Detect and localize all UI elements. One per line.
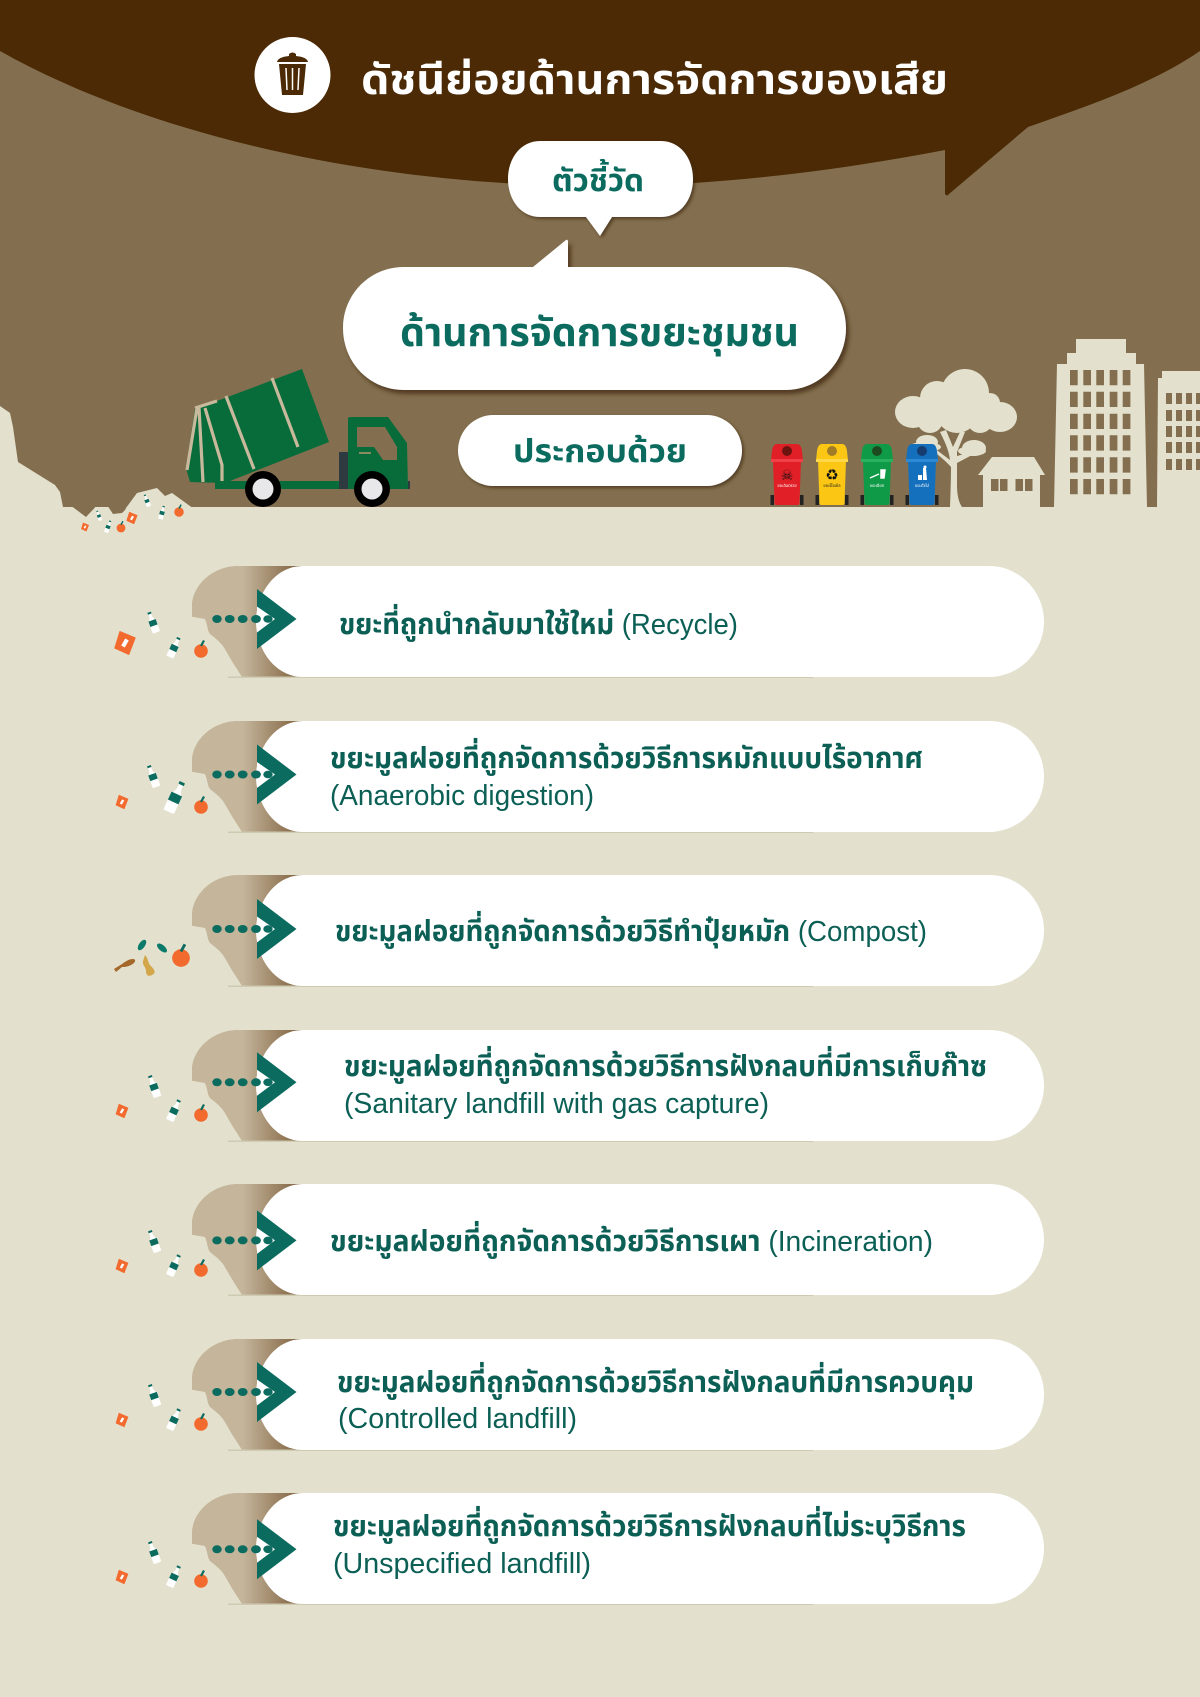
label: (Anaerobic digestion) [330, 780, 594, 812]
arrow with dots [212, 1210, 296, 1270]
bin: recycle yellow [816, 444, 848, 505]
label [330, 737, 923, 812]
bubble: consists of: ประกอบด้วย [513, 433, 687, 469]
title: ดัชนีย่อยด้านการจัดการของเสีย [361, 56, 948, 103]
bin: recycle yellow: ขยะรีไซเคิล [823, 483, 841, 488]
label: ขยะที่ถูกนำกลับมาใช้ใหม่ (Recycle) [339, 603, 738, 642]
row 2: anaerobic digestion [116, 721, 1044, 833]
litter icons [116, 764, 208, 814]
building: right edge tower [1157, 371, 1200, 507]
bubble: community waste management [343, 240, 846, 390]
background: brown sky [0, 0, 1200, 507]
bubble: indicator [508, 141, 693, 236]
bin: hazardous red: ☠ [781, 467, 793, 483]
bin: general blue [906, 444, 938, 505]
row 4: sanitary landfill [116, 1030, 1044, 1142]
bin: general blue: ขยะทั่วไป [915, 482, 930, 488]
row 6: controlled landfill [116, 1339, 1044, 1451]
tree [895, 369, 1017, 507]
row 5: incineration [116, 1184, 1044, 1296]
litter icons [116, 1229, 208, 1277]
house [978, 457, 1045, 507]
bin: recycle yellow: ♻ [825, 467, 839, 484]
litter icons [116, 1383, 208, 1431]
arrow with dots [212, 589, 296, 649]
row 7: unspecified landfill [116, 1493, 1044, 1605]
label [333, 1505, 966, 1580]
bin: organic green [860, 444, 894, 505]
bubble: consists of [458, 415, 742, 486]
landscape: left hill with waste pile [0, 406, 192, 533]
building: tall tower [1054, 339, 1147, 507]
litter icons [116, 1074, 208, 1122]
label: ขยะมูลฝอยที่ถูกจัดการด้วยวิธีการหมักแบบไร้อากาศ [330, 737, 923, 776]
label: ขยะมูลฝอยที่ถูกจัดการด้วยวิธีการฝังกลบที่ไม่ระบุวิธีการ [333, 1505, 966, 1544]
label [344, 1045, 987, 1120]
header speech banner [0, 0, 1200, 196]
litter icons [116, 1540, 208, 1588]
garbage truck [186, 369, 410, 507]
arrow with dots [212, 1362, 296, 1422]
label: (Sanitary landfill with gas capture) [344, 1088, 769, 1120]
arrow with dots [212, 899, 296, 959]
row 3: compost [114, 875, 1044, 987]
label: ขยะมูลฝอยที่ถูกจัดการด้วยวิธีการฝังกลบที่มีการควบคุม [337, 1361, 974, 1400]
label: ขยะมูลฝอยที่ถูกจัดการด้วยวิธีการฝังกลบที่มีการเก็บก๊าซ [344, 1045, 987, 1084]
bins: four coloured waste bins [770, 444, 938, 505]
organic litter icons [114, 938, 190, 976]
label: (Unspecified landfill) [333, 1548, 591, 1580]
bin: organic green: ขยะเปียก [870, 483, 885, 488]
label: (Controlled landfill) [338, 1403, 577, 1435]
arrow with dots [212, 744, 296, 804]
bin: hazardous red [770, 444, 804, 505]
bubble: community waste management: ด้านการจัดการขยะชุมชน [400, 310, 799, 357]
arrow with dots [212, 1052, 296, 1112]
row 1: recycle [114, 566, 1044, 678]
icon: trash can in circle [254, 37, 330, 113]
bubble: indicator: ตัวชี้วัด [552, 158, 644, 198]
arrow with dots [212, 1519, 296, 1579]
bin: hazardous red: ขยะอันตราย [777, 483, 797, 488]
litter icons [114, 611, 208, 659]
label [337, 1361, 974, 1435]
label: ขยะมูลฝอยที่ถูกจัดการด้วยวิธีทำปุ๋ยหมัก (Compost) [335, 910, 927, 949]
label: ขยะมูลฝอยที่ถูกจัดการด้วยวิธีการเผา (Incineration) [330, 1220, 933, 1259]
